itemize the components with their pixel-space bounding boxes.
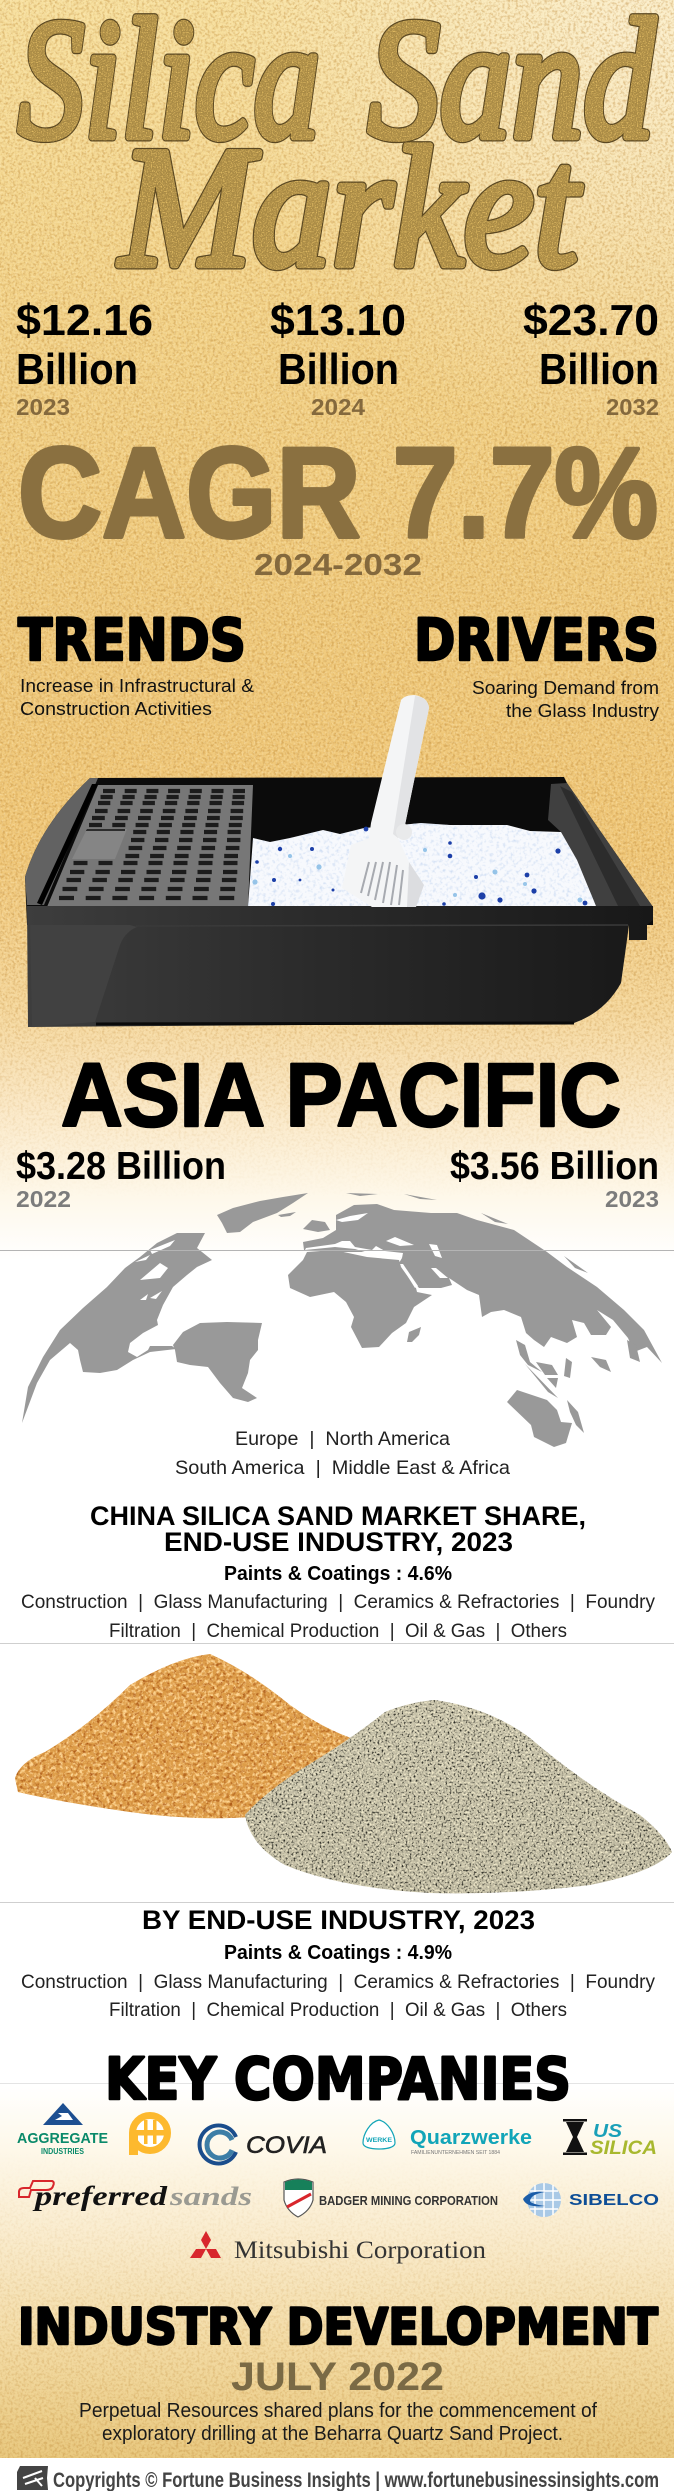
background: top sand texture (0, 0, 674, 1260)
region value 2022: $3.28 Billion (16, 1145, 226, 1188)
africa (288, 1250, 432, 1348)
north america (22, 1233, 212, 1423)
trends (18, 606, 255, 719)
trends: Construction Activities (20, 698, 212, 719)
scoop (342, 695, 429, 907)
logo: covia: COVIA (246, 2132, 327, 2159)
arctic islands (346, 1193, 378, 1196)
market size 2024: 2024 (311, 394, 365, 420)
region value 2023: 2023 (605, 1186, 659, 1212)
logo: covia (200, 2126, 327, 2164)
logo: preferred sands (19, 2181, 252, 2211)
orange sand pile (15, 1654, 357, 1818)
trends: Increase in Infrastructural & (20, 675, 255, 696)
canadian arctic gaps (135, 1240, 175, 1262)
china heading (90, 1501, 586, 1557)
drivers (414, 606, 660, 721)
key companies heading: KEY COMPANIES (105, 2045, 571, 2113)
tray front (27, 906, 653, 1027)
logo: aggregate industries: INDUSTRIES (41, 2147, 85, 2156)
logo: badger mining corporation: BADGER MINING CORPORATION (319, 2193, 498, 2208)
title (18, 0, 656, 303)
logo: badger mining corporation (284, 2179, 498, 2217)
south east asia (516, 1340, 542, 1372)
madagascar (407, 1327, 421, 1342)
logo: aggregate industries (17, 2103, 108, 2156)
china segment list: Filtration | Chemical Production | Oil & Gas | Others (109, 1621, 567, 1642)
uk (303, 1220, 330, 1232)
new guinea (567, 1400, 584, 1433)
market size 2023 (16, 296, 153, 420)
icon: fortune business insights (17, 2466, 48, 2490)
trends: TRENDS (18, 606, 246, 674)
china segment list: Construction | Glass Manufacturing | Ceramics & Refractories | Foundry (21, 1592, 655, 1613)
logo: quarzwerke (363, 2120, 532, 2156)
logo: quarzwerke: Quarzwerke (410, 2127, 532, 2149)
market size 2032 (523, 296, 659, 420)
development description (79, 2400, 597, 2445)
tray back wall (25, 777, 653, 925)
date: JULY 2022 (231, 2355, 444, 2399)
market size 2032: 2032 (606, 394, 659, 420)
market size 2023: 2023 (16, 394, 70, 420)
logo: preferred sands: preferred (32, 2181, 168, 2211)
tray right inner side (548, 783, 653, 907)
title: Market (117, 113, 582, 303)
development description: exploratory drilling at the Beharra Quartz Sand Project. (102, 2423, 563, 2445)
CAGR figure: 2024-2032 (254, 547, 422, 582)
china heading: END-USE INDUSTRY, 2023 (164, 1527, 513, 1557)
logo: quarzwerke: WERKE (366, 2138, 392, 2144)
eurasia (303, 1204, 662, 1363)
logo: us silica: SILICA (590, 2138, 657, 2159)
logo: sibelco: SIBELCO (569, 2192, 659, 2209)
global paints share: Paints & Coatings : 4.9% (224, 1942, 452, 1964)
logo: aggregate industries: AGGREGATE (17, 2130, 108, 2147)
logo: sibelco (523, 2183, 659, 2217)
market size 2032: $23.70 (523, 296, 659, 345)
market size 2023: $12.16 (16, 296, 153, 345)
logo: preferred sands: sands (169, 2182, 252, 2211)
by end-use heading: BY END-USE INDUSTRY, 2023 (142, 1905, 535, 1935)
drivers: the Glass Industry (506, 700, 660, 721)
drivers: Soaring Demand from (472, 677, 659, 698)
sea cut-outs (305, 1213, 448, 1288)
market size 2024: $13.10 (270, 296, 406, 345)
greenland (217, 1193, 308, 1233)
logo: us silica (563, 2119, 657, 2159)
market size 2024 (270, 296, 406, 420)
logo: quarzwerke: FAMILIENUNTERNEHMEN SEIT 1884 (411, 2150, 500, 2156)
japan and pacific islands (627, 1340, 640, 1362)
market size 2024: Billion (278, 345, 399, 394)
development description: Perpetual Resources shared plans for the commencement of (79, 2400, 597, 2422)
global segment list (21, 1972, 655, 2021)
world map (22, 1193, 662, 1447)
market size 2032: Billion (539, 345, 659, 394)
china paints share: Paints & Coatings : 4.6% (224, 1563, 452, 1585)
logo: mitsubishi corporation (190, 2231, 487, 2264)
grid insert (47, 785, 253, 907)
region heading: ASIA PACIFIC (61, 1046, 621, 1146)
china segment list (21, 1592, 655, 1642)
region value 2023: $3.56 Billion (450, 1145, 659, 1188)
tray front rim detail (30, 925, 137, 1027)
australia (507, 1390, 572, 1447)
icon: litter tray with silica sand and scoop (25, 695, 653, 1027)
grey sand pile (245, 1700, 672, 1893)
sand piles (15, 1654, 672, 1893)
other regions list (175, 1428, 510, 1479)
footer (0, 2458, 674, 2491)
background: bottom sand texture (0, 2085, 674, 2458)
global segment list: Construction | Glass Manufacturing | Ceramics & Refractories | Foundry (21, 1972, 655, 1993)
other regions list: South America | Middle East & Africa (175, 1457, 510, 1479)
logo: us silica: US (593, 2121, 622, 2141)
other regions list: Europe | North America (235, 1428, 450, 1450)
market size 2023: Billion (16, 345, 138, 394)
region value 2022: 2022 (16, 1186, 71, 1212)
region value 2023 (450, 1145, 659, 1212)
title: Market (117, 113, 582, 303)
silica litter (248, 823, 596, 907)
logo: mitsubishi corporation: Mitsubishi Corporation (234, 2237, 487, 2264)
tray left edge (25, 778, 98, 905)
caribbean (150, 1320, 182, 1338)
china heading: CHINA SILICA SAND MARKET SHARE, (90, 1501, 586, 1531)
region value 2022 (16, 1145, 226, 1212)
logo: yellow p mark (129, 2116, 168, 2155)
south america (173, 1322, 262, 1402)
global segment list: Filtration | Chemical Production | Oil & Gas | Others (109, 2000, 567, 2021)
divider lines (0, 1250, 674, 2084)
